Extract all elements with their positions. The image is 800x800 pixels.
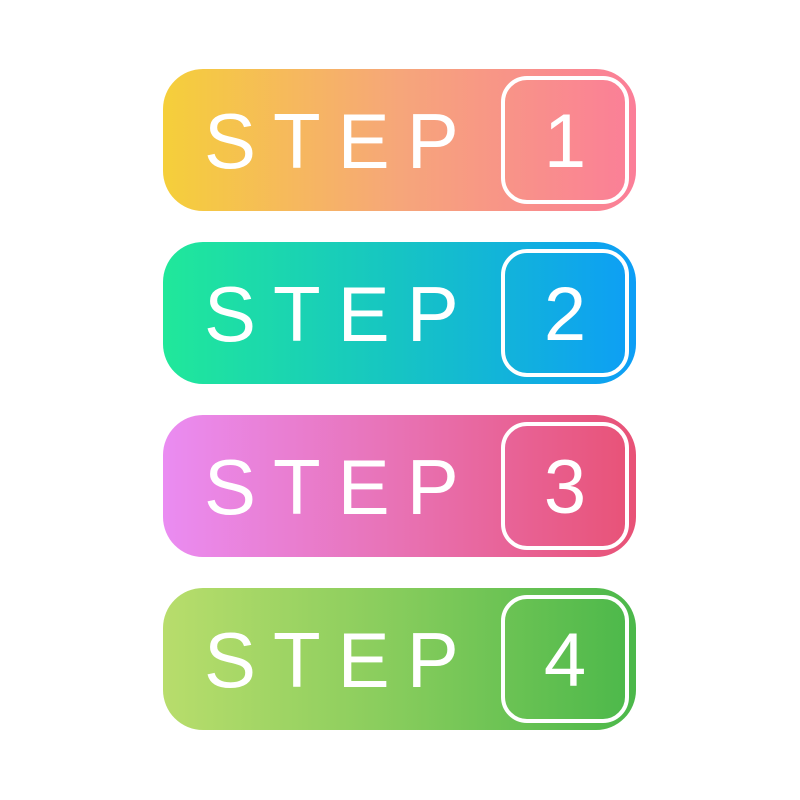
label: STEP 4: STEP: [204, 616, 476, 704]
number box: 2: 2: [544, 272, 586, 357]
button: step 2: [163, 242, 636, 384]
button: step 3: [163, 415, 636, 557]
number box: 1: [503, 78, 627, 202]
label: STEP 1: STEP: [204, 97, 476, 185]
label: STEP 3: STEP: [204, 443, 476, 531]
number box: 3: 3: [544, 445, 586, 530]
label: STEP 2: STEP: [204, 270, 476, 358]
number box: 3: [503, 424, 627, 548]
number box: 1: 1: [544, 99, 586, 184]
button: step 1: [163, 69, 636, 211]
number box: 2: [503, 251, 627, 375]
number box: 4: [503, 597, 627, 721]
number box: 4: 4: [544, 618, 586, 703]
button: step 4: [163, 588, 636, 730]
